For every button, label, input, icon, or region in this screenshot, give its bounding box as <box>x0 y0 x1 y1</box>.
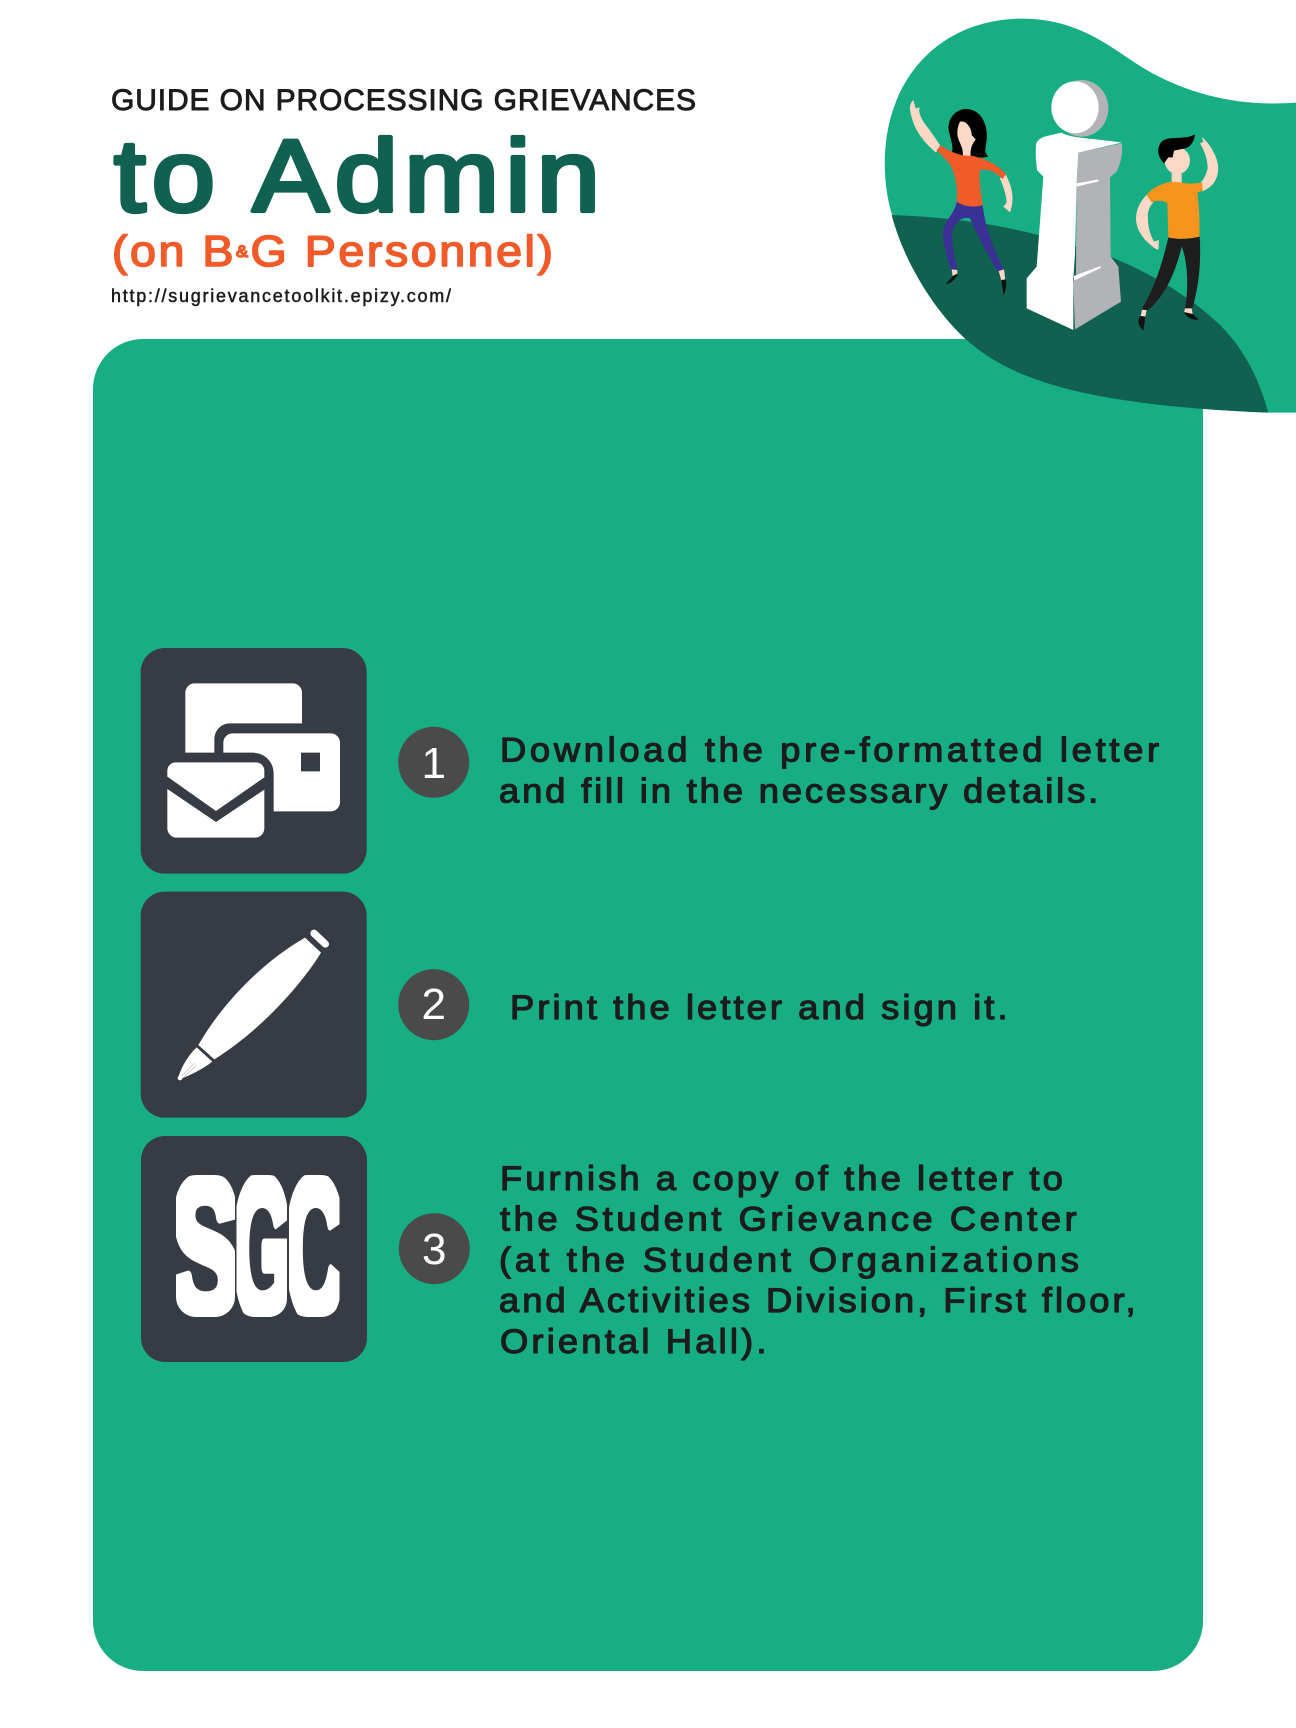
illustration: people and information statue on green blob <box>885 19 1296 413</box>
icon: SGC logo: S <box>171 1137 240 1361</box>
step 3 text: (at the Student Organizations <box>499 1242 1079 1279</box>
figure: woman in orange shirt <box>910 100 1013 295</box>
step 1 text <box>499 732 1159 810</box>
icon: pen <box>141 892 367 1118</box>
statue: information symbol <box>1027 80 1122 330</box>
header text block <box>111 84 696 306</box>
step 3 text: Oriental Hall). <box>500 1323 766 1361</box>
step 3 text <box>499 1160 1136 1361</box>
icon: letters and envelope <box>141 648 367 874</box>
step 3 text: Furnish a copy of the letter to <box>500 1160 1063 1198</box>
icon: SGC logo <box>141 1136 367 1362</box>
green blob <box>885 19 1296 413</box>
figure: man in yellow shirt <box>1136 134 1218 331</box>
step 1 text: Download the pre-formatted letter <box>500 732 1159 769</box>
step 3 text: the Student Grievance Center <box>500 1201 1077 1238</box>
number badge 3 <box>399 1213 470 1284</box>
step 1 text: and fill in the necessary details. <box>499 773 1098 810</box>
number badge 2 <box>398 969 469 1040</box>
icon: SGC logo: G <box>232 1138 292 1362</box>
icon: SGC logo: C <box>285 1138 343 1361</box>
number badge 1 <box>398 727 469 798</box>
panel: main green background <box>93 339 1203 1671</box>
dark green ground <box>892 215 1268 413</box>
number badge 2: 2 <box>421 980 446 1029</box>
title: to Admin: to Admin <box>114 119 600 233</box>
number badge 3: 3 <box>422 1225 447 1274</box>
step 3 text: and Activities Division, First floor, <box>499 1282 1136 1320</box>
subtitle: on B&G Personnel: (on B <box>112 226 234 276</box>
heading: guide on processing grievances: GUIDE ON PROCESSING GRIEVANCES <box>111 84 696 117</box>
subtitle: on B&G Personnel: & <box>236 241 248 261</box>
step 2 text: Print the letter and sign it. <box>510 989 1008 1027</box>
number badge 1: 1 <box>421 739 446 788</box>
url: http://sugrievancetoolkit.epizy.com/ <box>111 286 451 306</box>
subtitle: on B&G Personnel: G Personnel) <box>251 226 553 276</box>
